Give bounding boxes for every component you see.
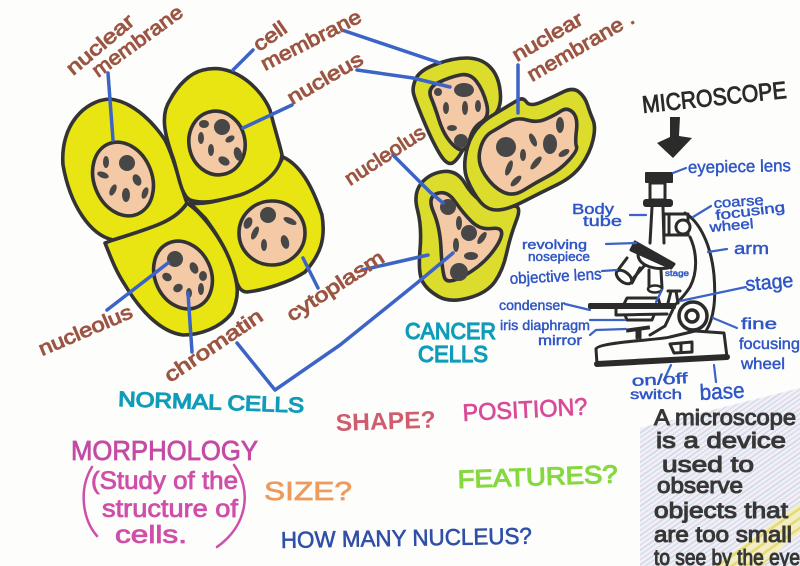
microscope part labels: focusing	[739, 336, 800, 353]
microscope part labels: fine	[741, 316, 777, 333]
microscope part labels: coarse	[713, 192, 764, 211]
label: nucleus (normal cell): nucleus	[284, 48, 367, 109]
microscope part labels: eyepiece lens	[688, 156, 791, 177]
text block: microscope definition: objects that	[654, 498, 788, 523]
microscope illustration	[588, 172, 727, 364]
label: cell membrane: membrane	[257, 6, 365, 75]
heading: morphology: MORPHOLOGY	[71, 435, 258, 466]
label: cytoplasm: cytoplasm	[283, 247, 389, 326]
text block: microscope definition: A microscope	[654, 405, 796, 430]
text block: morphology definition: structure of	[102, 495, 238, 523]
arrow: down to microscope	[657, 117, 692, 158]
question: shape: SHAPE?	[335, 407, 436, 437]
label: nucleolus (cancer cell): nucleolus	[341, 122, 430, 190]
label: nuclear membrane (cancer cell): membrane .	[524, 7, 638, 86]
heading: normal cells: NORMAL CELLS	[118, 388, 305, 417]
microscope part labels	[499, 156, 800, 405]
label: nuclear membrane (normal cell): nuclear	[62, 10, 139, 80]
normal cells diagram	[63, 69, 323, 335]
text block: morphology definition	[84, 465, 245, 549]
microscope part labels: base	[699, 378, 745, 405]
microscope part labels: stage	[665, 269, 690, 278]
text block: microscope definition: are too small	[654, 522, 792, 547]
microscope part labels: objective lens	[509, 266, 602, 288]
microscope part labels: stage	[745, 270, 794, 296]
microscope part labels: Body	[572, 201, 615, 218]
microscope part labels: mirror	[538, 332, 582, 348]
question: features: FEATURES?	[457, 460, 618, 494]
label: nuclear membrane (normal cell): membrane	[88, 1, 188, 82]
microscope part labels: on/off	[631, 370, 689, 390]
label: chromatin: chromatin	[160, 305, 267, 387]
label: cell membrane: cell	[249, 17, 291, 56]
microscope part labels: wheel	[708, 215, 754, 235]
microscope part labels: switch	[630, 386, 682, 402]
microscope part leader lines	[565, 168, 746, 382]
question: size: SIZE?	[264, 476, 352, 506]
text block: microscope definition: is a device	[656, 428, 786, 453]
label: nuclear membrane (cancer cell): nuclear	[508, 8, 587, 66]
label: nucleolus (normal cell): nucleolus	[35, 301, 136, 361]
question: how many nucleus: HOW MANY NUCLEUS?	[281, 523, 532, 553]
text block: microscope definition: used to	[662, 452, 754, 477]
text block: morphology definition: cells.	[115, 521, 187, 549]
heading: cancer cells: CANCER	[405, 318, 496, 344]
microscope part labels: tube	[583, 213, 622, 230]
label leader lines	[107, 30, 518, 390]
microscope part labels: nosepiece	[528, 249, 590, 264]
heading: cancer cells	[405, 318, 496, 367]
panel: microscope definition shading	[640, 388, 800, 566]
text block: microscope definition: observe	[657, 473, 743, 498]
microscope part labels: iris diaphragm	[500, 317, 590, 333]
microscope part labels: condenser	[499, 297, 565, 313]
label: nuclear membrane (normal cell)	[62, 1, 188, 82]
cancer cells diagram	[413, 58, 594, 300]
microscope part labels: arm	[734, 239, 769, 258]
heading: cancer cells: CELLS	[418, 341, 488, 367]
microscope part labels: focusing	[714, 199, 786, 223]
microscope part labels: wheel	[740, 356, 785, 373]
text block: morphology definition: (Study of the	[91, 467, 238, 495]
text block: microscope definition	[654, 405, 800, 566]
microscope part labels: revolving	[522, 237, 587, 252]
question: position: POSITION?	[462, 393, 588, 427]
